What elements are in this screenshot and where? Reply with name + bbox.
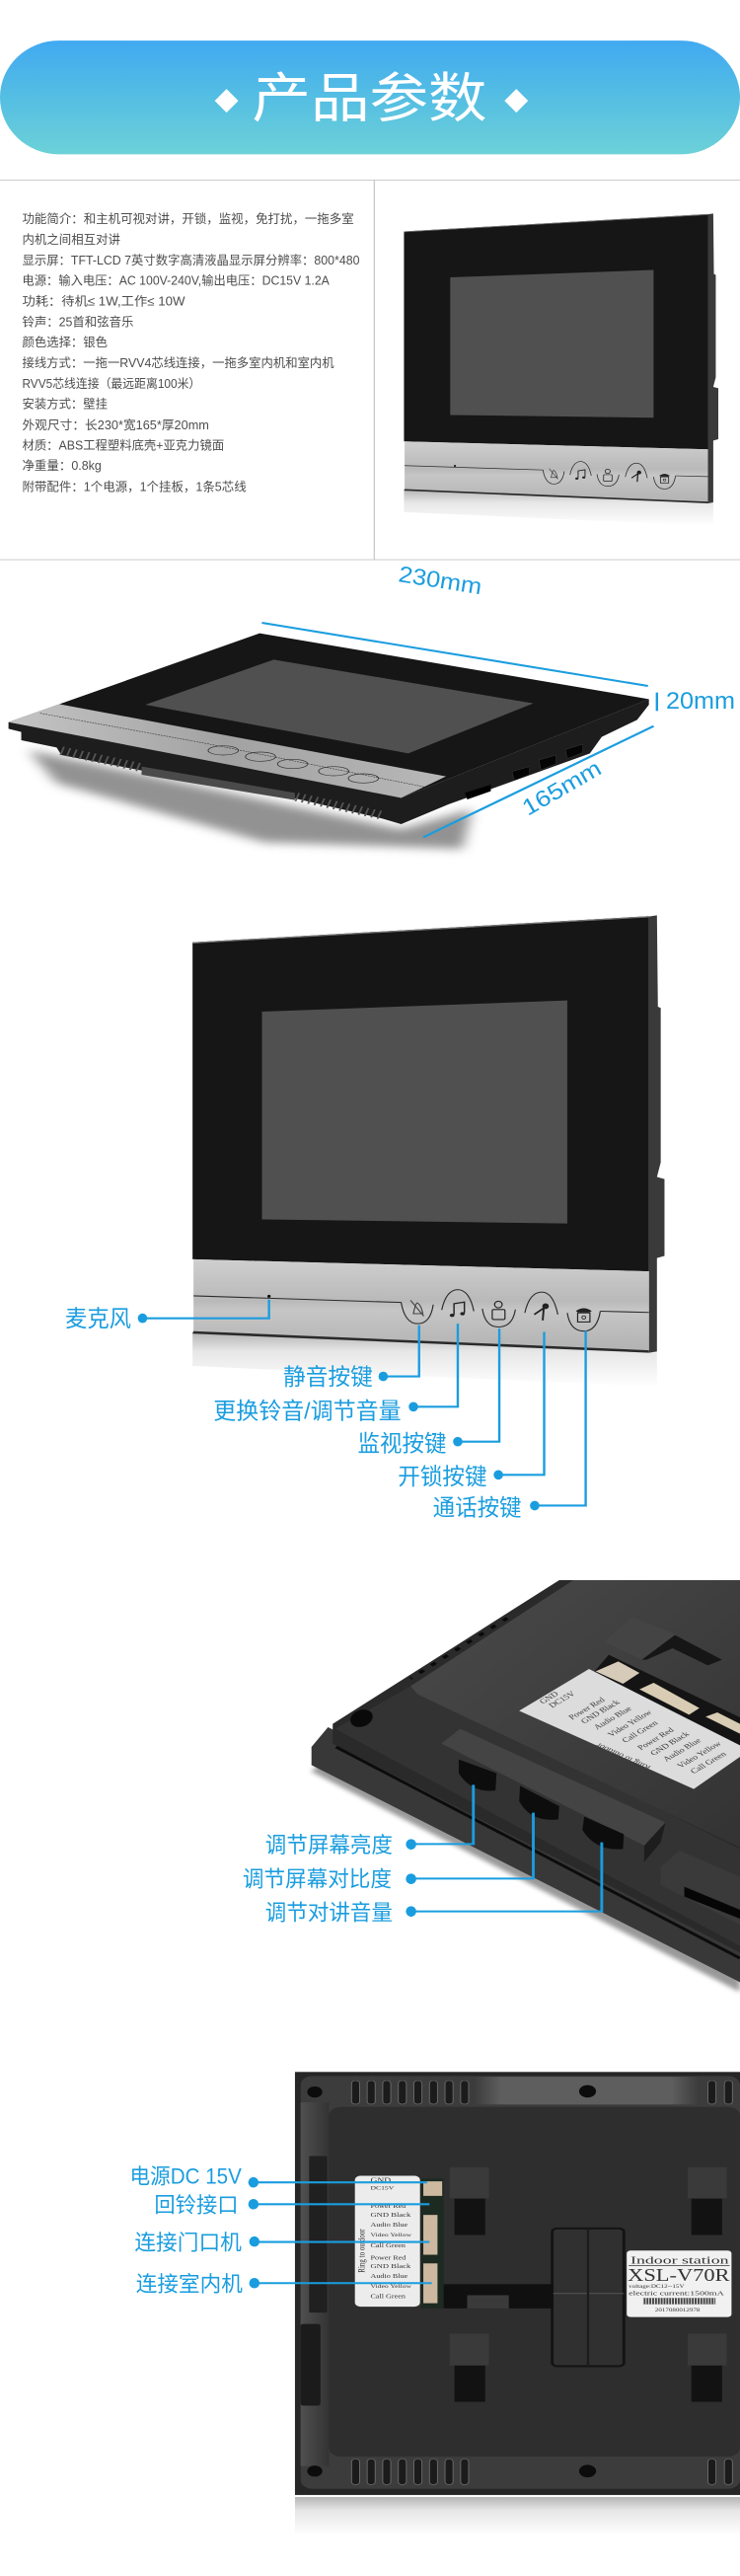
product photo: rear corner: Audio Blue [660,1736,703,1763]
callout: talk volume wheel: 调节对讲音量 [265,1900,393,1925]
product photo: front view [404,213,718,526]
product photo: rear view: XSL-V70R [628,2265,729,2285]
callout: ring port: 回铃接口 [154,2193,239,2218]
dimension: 230mm: 230mm [397,561,483,599]
callout: DC 15V power: 电源DC 15V [130,2164,242,2189]
spec text list: 电源：输入电压：AC 100V-240V,输出电压：DC15V 1.2A [22,274,330,288]
product photo: rear corner: Call Green [688,1749,729,1776]
callout: door unit port [134,2231,429,2255]
dimension: 230mm [261,561,648,686]
spec text list: 外观尺寸：长230*宽165*厚20mm [22,418,209,432]
product photo: rear view: GND Black [370,2262,411,2269]
callout: talk button [433,1330,586,1521]
product photo: front view [192,915,664,1387]
product photo: rear corner: Power Red [635,1725,677,1752]
product photo: rear view: Video Yellow [370,2284,411,2290]
product photo: rear view: 2017080012978 [655,2308,701,2313]
callout: talk volume wheel [265,1843,602,1925]
spec text list [22,212,359,494]
spec text list: RVV5芯线连接（最远距离100米） [22,377,200,391]
product photo: rear view: GND Black [370,2211,411,2219]
spec text list: 安装方式：壁挂 [22,398,108,412]
spec text list: 显示屏：TFT-LCD 7英寸数字高清液晶显示屏分辨率：800*480 [22,253,359,267]
product photo: rear view: Audio Blue [370,2222,407,2229]
product photo: rear view: Call Green [370,2242,406,2248]
callout: contrast wheel [243,1813,534,1891]
product photo: rear corner: GND Black [648,1729,692,1757]
callout: brightness wheel: 调节屏幕亮度 [265,1833,393,1857]
product photo: rear view: Indoor station [630,2254,729,2266]
side adjustment wheels diagram [243,1580,740,1992]
title banner [0,40,740,154]
title text: 产品参数 [252,68,487,128]
product photo: rear corner: Call Green [620,1718,660,1744]
callout: brightness wheel [265,1784,474,1857]
callout: monitor button: 监视按键 [358,1431,446,1457]
product photo: rear corner: GND [537,1690,560,1705]
product photo: rear corner: Power Red [566,1696,608,1721]
spec text list: 功耗：待机≤ 1W,工作≤ 10W [22,295,185,309]
callout: ringtone and volume button: 更换铃音/调节音量 [213,1399,402,1424]
product photo: rear corner [312,1580,740,1992]
spec text list: 接线方式：一拖一RVV4芯线连接，一拖多室内机和室内机 [22,356,334,371]
callout: microphone: 麦克风 [65,1307,131,1332]
callout: monitor button [358,1328,499,1457]
product photo: rear corner: GND Black [578,1698,623,1725]
left diamond [215,89,239,113]
product photo: rear view: GND [370,2177,391,2184]
spec text list: 材质：ABS工程塑料底壳+亚克力镜面 [22,438,224,453]
product photo: rear view: Call Green [370,2294,406,2300]
callout: ring port [154,2193,429,2218]
product photo: rear view: Ring to outdoor [357,2229,367,2273]
callout: indoor unit port [136,2271,432,2296]
dimension: 165mm [423,726,653,837]
callout: indoor unit port: 连接室内机 [136,2271,243,2296]
dimensions diagram [9,561,735,849]
product photo: rear view: voltage:DC12--15V [629,2284,685,2290]
device shadow [29,750,472,849]
product photo: rear view: DC15V [370,2185,394,2191]
spec text list: 附带配件：1个电源，1个挂板，1条5芯线 [22,479,247,494]
spec text list: 铃声：25首和弦音乐 [22,314,133,330]
product photo: rear view: Video Yellow [370,2233,411,2238]
product photo: rear view: electric current:1500mA [629,2290,724,2297]
callout: microphone [65,1300,269,1332]
product photo: rear corner: Video Yellow [605,1707,654,1738]
product photo: rear view: Power Red [370,2203,407,2210]
callout: DC 15V power [130,2164,427,2189]
product photo: rear corner: DC15V [547,1689,578,1709]
callout: door unit port: 连接门口机 [134,2231,242,2255]
callout: mute button [283,1326,419,1391]
spec text list: 内机之间相互对讲 [22,233,120,247]
product photo: rear corner: Audio Blue [591,1705,633,1731]
spec text list: 颜色选择：银色 [22,336,108,350]
dimension: 165mm: 165mm [518,755,606,820]
dimension: 20mm: 20mm [666,688,735,715]
product photo: rear corner: Video Yellow [675,1739,724,1770]
rear connectors diagram [130,2072,740,2536]
callout: mute button: 静音按键 [283,1364,373,1391]
device body [9,634,649,824]
callout: talk button: 通话按键 [433,1495,522,1521]
callout: unlock button [398,1332,545,1490]
spec panel [0,180,740,560]
right diamond [504,89,528,113]
callout: ringtone and volume button [213,1324,458,1424]
product photo: rear view: Power Red [370,2254,407,2261]
front panel buttons diagram [65,915,664,1521]
callout: unlock button: 开锁按键 [398,1464,487,1490]
callout: contrast wheel: 调节屏幕对比度 [243,1866,392,1891]
product photo: rear view: Audio Blue [370,2273,407,2280]
product photo: rear view [295,2072,740,2536]
product photo: rear corner: Ring to outdoor [594,1741,652,1772]
spec text list: 功能简介：和主机可视对讲，开锁，监视，免打扰，一拖多室 [22,212,354,227]
spec text list: 净重量：0.8kg [22,459,102,474]
